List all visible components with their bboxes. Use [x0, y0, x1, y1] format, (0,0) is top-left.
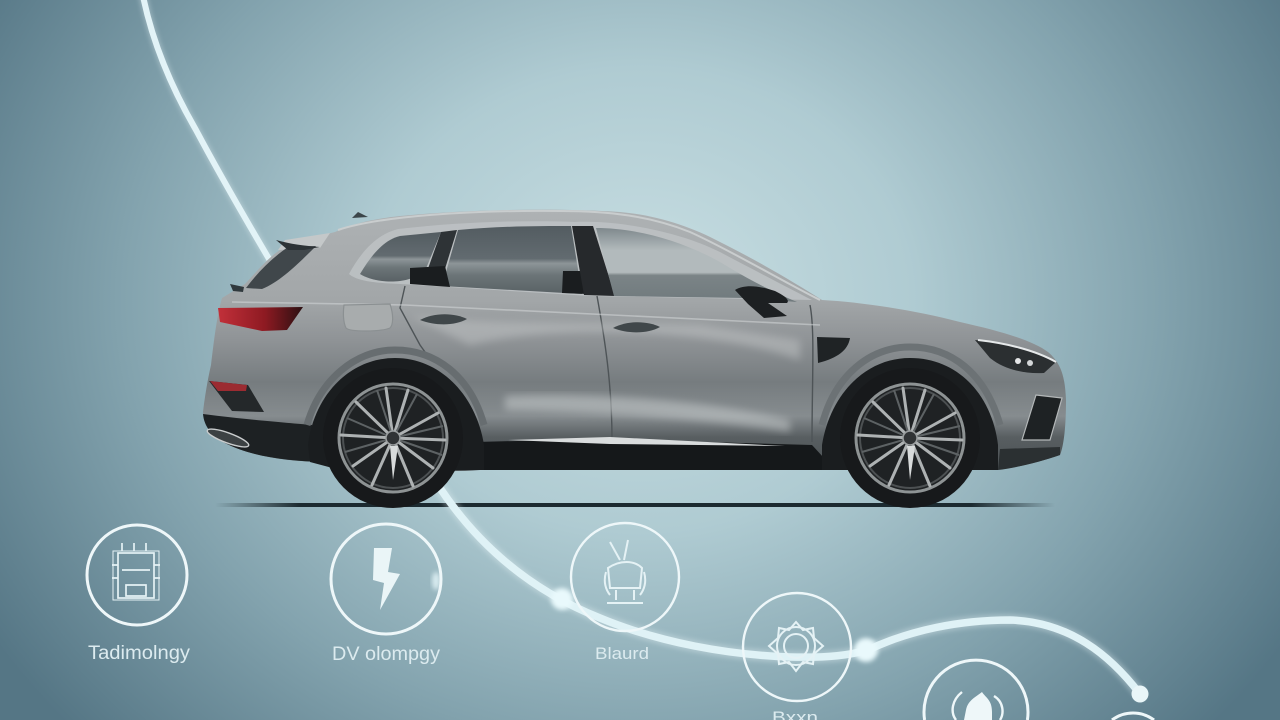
step 6: partial ring — [1112, 713, 1154, 720]
ground shadow — [215, 503, 1055, 507]
wheel: rear — [323, 368, 463, 508]
step 2: ev charging — [331, 524, 441, 665]
rear bumper — [203, 414, 325, 462]
glowing curve: upper segment — [143, 0, 272, 264]
rear lower reflector — [209, 381, 264, 412]
icon: gear badge — [769, 622, 823, 671]
step 1: technology — [87, 525, 191, 664]
label: Blaurd — [595, 644, 649, 663]
glowing curve: lower segment with nodes — [432, 488, 1148, 702]
car roof highlight — [338, 211, 820, 300]
quarter window — [360, 232, 441, 282]
front air intake — [1022, 395, 1062, 440]
rear spoiler — [276, 240, 320, 250]
fuel flap — [343, 304, 393, 331]
icon: seat with tools — [605, 540, 645, 603]
rear hatch panel — [278, 233, 330, 250]
icon: abstract figure — [953, 692, 1002, 720]
tail light — [218, 307, 303, 331]
seat silhouette — [410, 266, 612, 295]
door handle rear — [420, 314, 467, 324]
step 4: power — [743, 593, 851, 720]
step 5: partial icon — [924, 660, 1028, 720]
fender vent — [817, 337, 850, 363]
front bumper lip — [998, 447, 1060, 470]
rear door window — [442, 226, 582, 294]
wheel: front — [840, 368, 980, 508]
mirror — [735, 286, 788, 318]
label: DV olompgy — [332, 644, 441, 665]
car — [203, 210, 1066, 508]
door seams — [400, 286, 813, 442]
rear window — [246, 246, 316, 289]
icon ring — [743, 593, 851, 701]
label: Tadimolngy — [88, 643, 191, 664]
side skirt — [475, 439, 835, 470]
car body — [203, 210, 1066, 471]
icon ring — [924, 660, 1028, 720]
icon ring — [571, 523, 679, 631]
rear spoiler tip — [352, 212, 368, 218]
b-pillar — [572, 226, 615, 296]
front wheel arch — [822, 358, 998, 470]
window frame — [349, 221, 812, 300]
exhaust — [206, 426, 250, 450]
icon: lightning bolt — [373, 548, 400, 610]
icon ring — [87, 525, 187, 625]
character line highlight — [232, 302, 820, 325]
headlight — [975, 340, 1056, 373]
door highlight — [410, 315, 800, 360]
icon: circuit board — [112, 543, 160, 600]
front door window — [596, 228, 797, 302]
pillar — [424, 230, 457, 285]
rear small tip — [230, 284, 244, 292]
rear wheel arch — [308, 358, 484, 470]
step 3: brand — [571, 523, 679, 663]
door handle front — [613, 322, 660, 332]
icon ring — [331, 524, 441, 634]
lower body sheen — [505, 395, 790, 432]
